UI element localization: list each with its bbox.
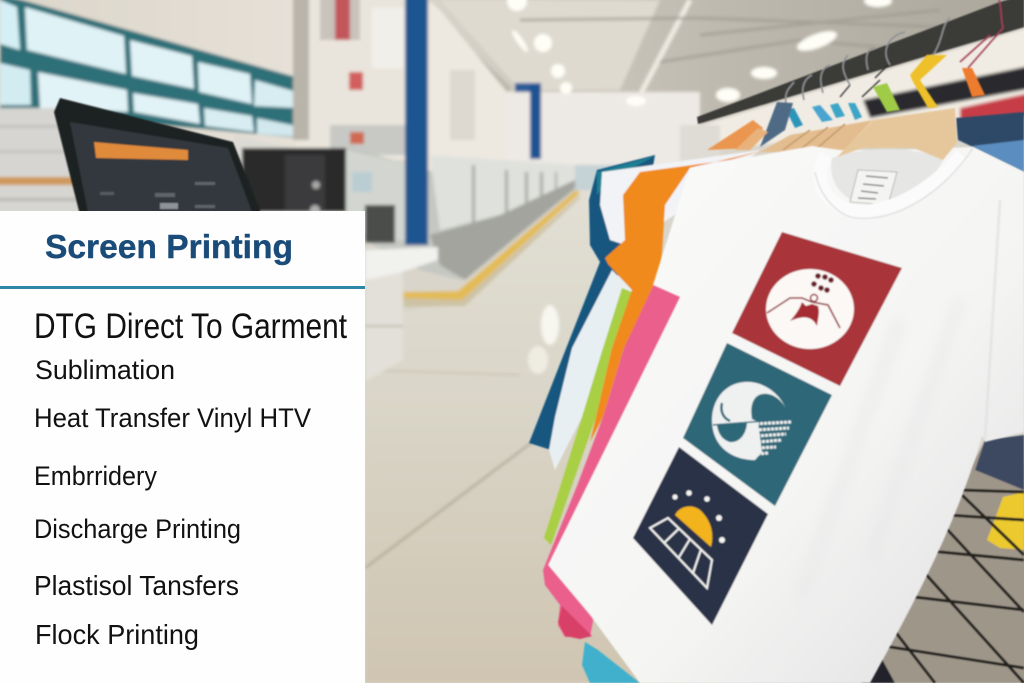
heading: Screen Printing — [45, 228, 293, 265]
hanging garment sliver — [760, 102, 793, 147]
pale blue shirt — [549, 270, 632, 470]
yellow floor strip — [403, 190, 580, 302]
windows — [0, 0, 299, 138]
panel: print methods list — [0, 211, 365, 683]
black machine — [235, 135, 345, 215]
method: sublimation: Sublimation — [35, 355, 175, 385]
wire rack and floor — [860, 435, 1024, 683]
front white t-shirt — [548, 108, 1024, 683]
monitor — [54, 98, 262, 215]
blue column — [405, 0, 428, 245]
collar — [820, 155, 962, 211]
floor — [365, 190, 650, 683]
back rack of colored shirts — [529, 150, 765, 683]
cyan shirt bottom — [582, 642, 640, 683]
orange bar on screen — [94, 142, 188, 160]
center wall — [296, 0, 416, 160]
print panel: navy — [633, 447, 768, 625]
heading divider — [0, 286, 365, 289]
method: flock: Flock Printing — [35, 619, 199, 650]
hanger hooks — [786, 18, 950, 105]
far right background — [700, 25, 1024, 150]
navy shirt — [529, 155, 655, 450]
pink shirt — [543, 280, 682, 637]
wooden hanger — [837, 108, 957, 160]
white back shirt — [600, 150, 760, 245]
print panel: teal — [683, 343, 832, 506]
lower corrugated wall — [0, 108, 100, 218]
ceiling — [416, 0, 1024, 125]
hanger rail — [697, 0, 1024, 172]
inner neck and label — [831, 149, 943, 203]
blue knit shirt — [956, 112, 1024, 172]
method: plastisol: Plastisol Tansfers — [34, 570, 239, 601]
colored clips — [910, 55, 947, 108]
method: embroidery: Embrridery — [34, 461, 157, 491]
left wall — [0, 0, 300, 210]
orange shirt — [590, 150, 765, 442]
wooden hangers — [707, 120, 763, 150]
white work table — [365, 247, 438, 280]
method: DTG: DTG Direct To Garment — [34, 307, 347, 346]
printing machine row — [345, 145, 575, 280]
ceiling lights — [507, 0, 892, 106]
side wall and back wall — [416, 0, 510, 170]
method: HTV: Heat Transfer Vinyl HTV — [34, 403, 311, 433]
lime shirt — [544, 288, 632, 545]
method: discharge: Discharge Printing — [34, 514, 241, 544]
print panel: red — [732, 232, 902, 386]
